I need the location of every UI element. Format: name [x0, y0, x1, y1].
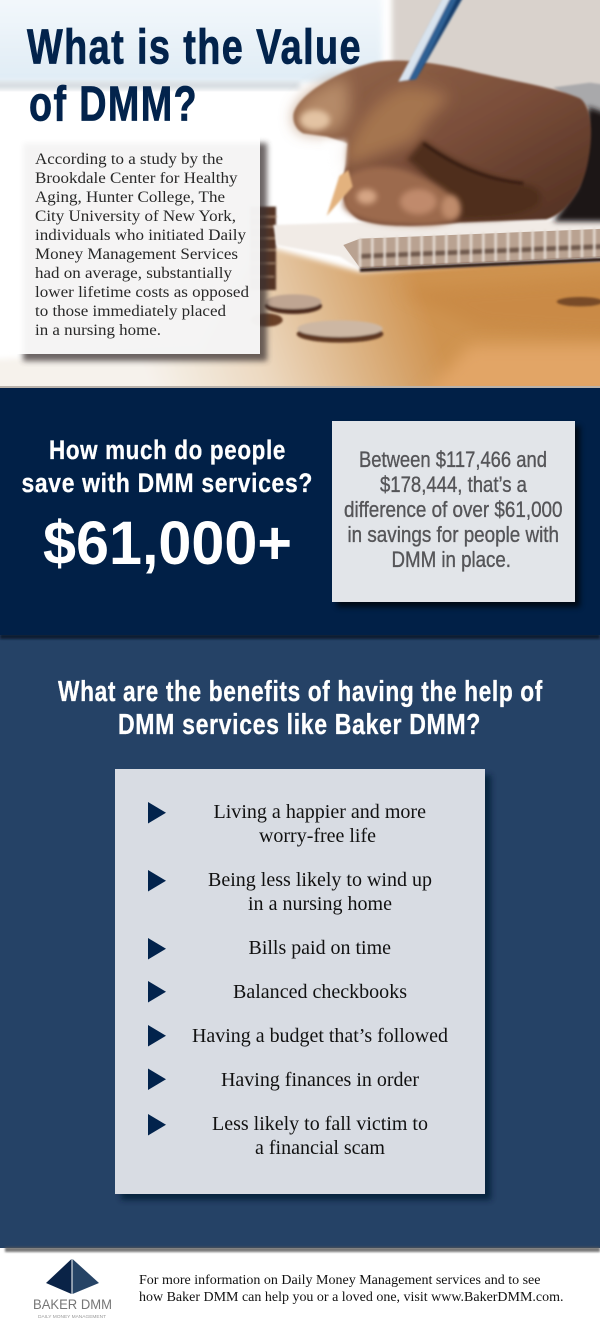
- benefits card: [115, 769, 491, 1200]
- coin left: [265, 294, 322, 314]
- notebook: [273, 220, 600, 270]
- benefit 1: Living a happier and more: [214, 802, 426, 823]
- benefit 4: [148, 981, 407, 1003]
- benefit 2: Being less likely to wind up: [208, 870, 432, 891]
- savings section background: [0, 388, 600, 635]
- cuff shadow: [553, 107, 600, 222]
- benefits card background: [115, 769, 485, 1194]
- intro panel: [16, 136, 267, 361]
- intro text: According to a study by the: [35, 151, 223, 168]
- background wall top right: [392, 0, 600, 120]
- back finger: [295, 78, 350, 133]
- benefit 2: [148, 870, 432, 915]
- hero photo: hand writing in notebook: [0, 0, 600, 400]
- footer text: [139, 1272, 564, 1304]
- savings section shadow: [0, 634, 600, 639]
- savings heading: How much do people: [49, 435, 286, 465]
- logo: [33, 1259, 112, 1319]
- intro text: had on average, substantially: [35, 265, 232, 282]
- card shadow: [337, 426, 580, 607]
- benefit 2: in a nursing home: [248, 894, 392, 915]
- intro text: individuals who initiated Daily: [35, 227, 246, 244]
- title: of DMM?: [29, 78, 198, 132]
- lower fingers: [343, 167, 460, 225]
- benefit 3: Bills paid on time: [248, 938, 391, 959]
- intro text: Money Management Services: [35, 246, 238, 263]
- coin front: [297, 320, 383, 343]
- savings section: [0, 388, 600, 639]
- intro text: Aging, Hunter College, The: [35, 189, 225, 206]
- crease: [423, 143, 523, 183]
- card text: DMM in place.: [392, 547, 511, 572]
- finger glare: [322, 140, 346, 182]
- benefit 5: Having a budget that’s followed: [192, 1026, 448, 1047]
- coin stack: [250, 207, 277, 290]
- card text: $178,444, that’s a: [380, 472, 528, 497]
- intro text: in a nursing home.: [35, 322, 161, 339]
- index finger: [345, 86, 450, 167]
- benefit 6: [148, 1068, 420, 1091]
- title: [27, 20, 362, 132]
- benefit 3: [148, 938, 391, 960]
- hero bottom edge: [0, 386, 600, 388]
- benefit 6: Having finances in order: [221, 1070, 420, 1091]
- intro text: Brookdale Center for Healthy: [35, 170, 238, 187]
- footer shadow: [5, 1247, 600, 1252]
- panel background: [16, 136, 260, 354]
- benefits section background: [0, 634, 600, 1248]
- pen: [398, 0, 465, 82]
- logo wordmark: BAKER DMM: [33, 1296, 112, 1312]
- benefit 7: Less likely to fall victim to: [212, 1114, 428, 1135]
- benefits heading: [58, 676, 543, 741]
- footer: [5, 1247, 600, 1319]
- dark knot on desk: [557, 297, 600, 306]
- window glow top left: [0, 0, 382, 82]
- benefit 7: a financial scam: [255, 1138, 385, 1159]
- footer text: how Baker DMM can help you or a loved one, visit www.BakerDMM.com.: [139, 1289, 564, 1304]
- savings heading: [22, 435, 313, 498]
- pencil tip: [327, 170, 353, 216]
- panel shadow: [23, 143, 267, 361]
- wood desk: [0, 245, 600, 400]
- footer text: For more information on Daily Money Management services and to see: [139, 1272, 541, 1287]
- savings heading: save with DMM services?: [22, 468, 313, 498]
- benefit 4: Balanced checkbooks: [233, 982, 407, 1003]
- benefit 1: worry-free life: [259, 826, 376, 847]
- benefits section: [58, 676, 543, 1200]
- benefit 7: [148, 1114, 428, 1159]
- intro text: [35, 151, 249, 339]
- card background: [332, 421, 575, 602]
- intro text: to those immediately placed: [35, 303, 226, 320]
- intro text: City University of New York,: [35, 208, 236, 225]
- savings card: [332, 421, 580, 607]
- intro text: lower lifetime costs as opposed: [35, 284, 249, 301]
- savings amount: $61,000+: [43, 509, 292, 577]
- window frame band: [0, 82, 300, 89]
- sleeve: [553, 83, 600, 120]
- logo mark: [46, 1259, 99, 1294]
- card text: difference of over $61,000: [344, 497, 562, 522]
- benefit 1: [148, 802, 426, 847]
- hand: [293, 60, 591, 226]
- palm shadow: [407, 140, 541, 220]
- benefits heading: DMM services like Baker DMM?: [118, 709, 481, 741]
- desk light corner: [420, 345, 600, 400]
- card text: in savings for people with: [348, 522, 559, 547]
- benefits card shadow: [121, 775, 491, 1200]
- desk warm tone: [400, 275, 600, 340]
- logo tagline: DAILY MONEY MANAGEMENT: [38, 1314, 106, 1319]
- coin low: [251, 313, 283, 327]
- title: What is the Value: [27, 20, 362, 74]
- card text: Between $117,466 and: [359, 447, 547, 472]
- card text: [344, 447, 562, 572]
